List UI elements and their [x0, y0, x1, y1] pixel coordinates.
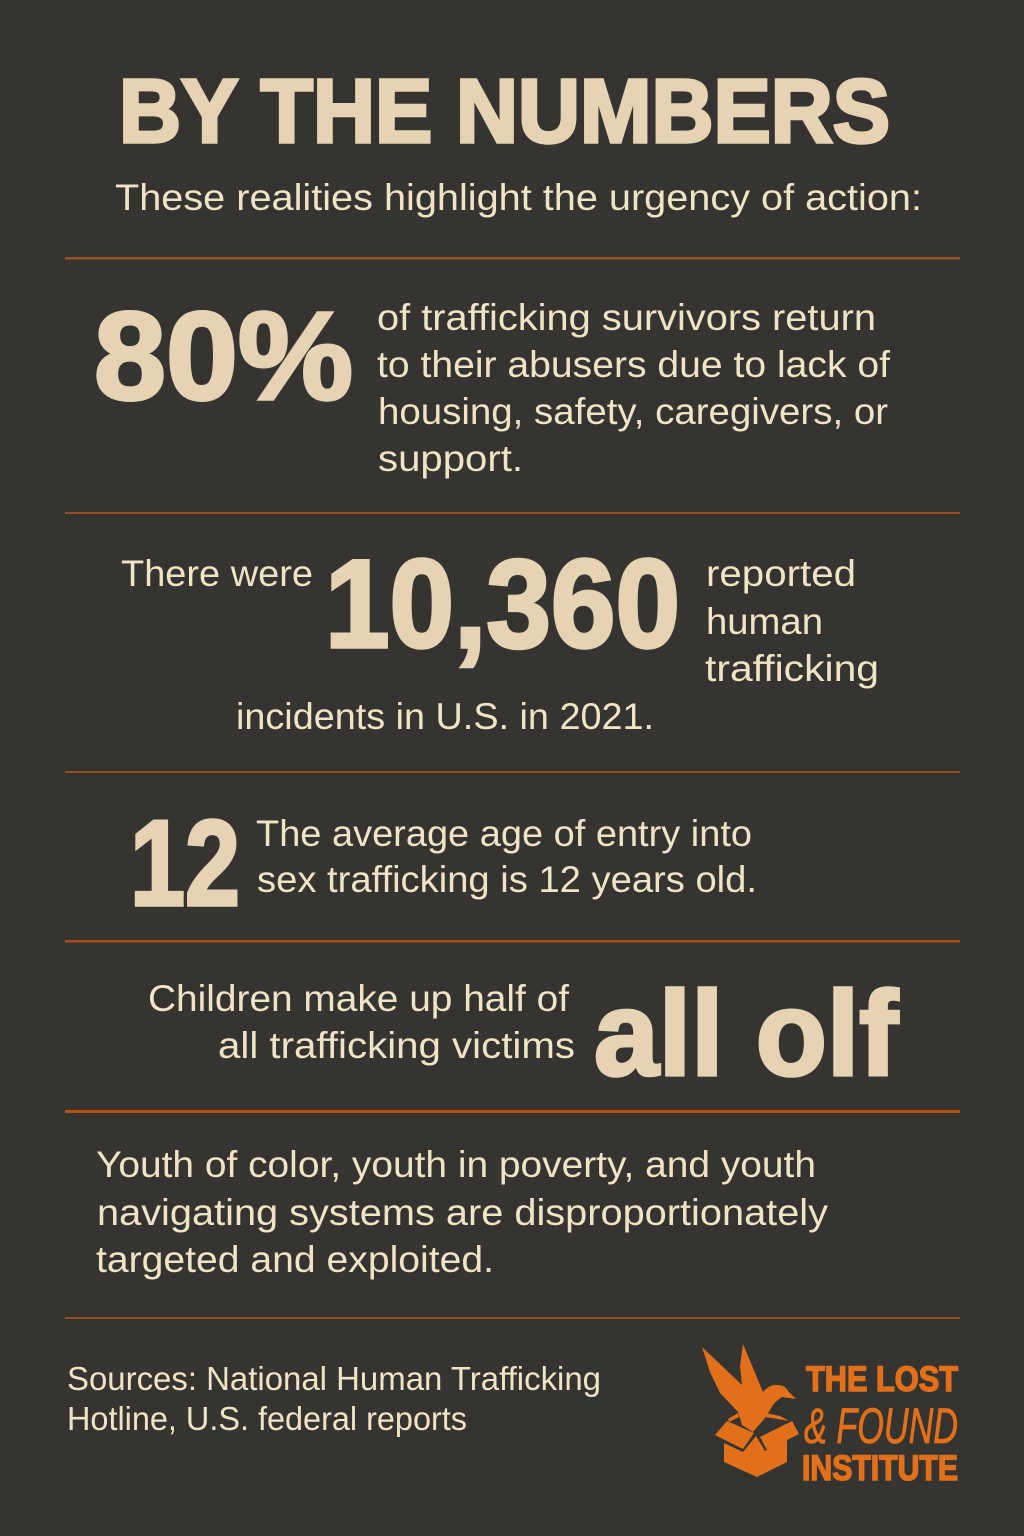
sources: Sources: National Human Trafficking [67, 1360, 601, 1397]
text: average age [256, 813, 757, 900]
text: children make up half: all trafficking victims [218, 1025, 575, 1066]
panel: 10,360 statistic [121, 535, 879, 737]
logo text [802, 1360, 958, 1488]
text: children make up half: Children make up half of [148, 978, 570, 1019]
logo text: INSTITUTE [802, 1449, 958, 1488]
text: average age: sex trafficking is 12 years old. [257, 859, 757, 900]
text: youth of color: Youth of color, youth in poverty, and youth [96, 1144, 816, 1185]
text: children make up half [148, 978, 575, 1066]
sources [67, 1360, 601, 1437]
text: youth of color: targeted and exploited. [96, 1239, 494, 1280]
title: BY THE NUMBERS [119, 62, 890, 162]
text: reported human trafficking: trafficking [705, 648, 879, 689]
text: youth of color [96, 1144, 829, 1280]
icon: bird rising from box [702, 1344, 799, 1477]
big number: 12: 12 [130, 795, 240, 931]
logo text: THE LOST [806, 1360, 958, 1399]
logo: The Lost & Found Institute [702, 1344, 958, 1488]
subtitle: These realities highlight the urgency of action: [115, 177, 922, 218]
text: survivors return: support. [378, 438, 523, 479]
text: there were: There were [121, 553, 313, 594]
panel: children statistic [148, 967, 899, 1101]
big number: 10,360: 10,360 [325, 535, 680, 674]
text: reported human trafficking [705, 553, 879, 689]
text: reported human trafficking: human [706, 601, 823, 642]
sources: Hotline, U.S. federal reports [67, 1400, 467, 1437]
big words: all olf: all olf [594, 967, 899, 1101]
text: average age: The average age of entry into [256, 813, 752, 854]
text: youth of color: navigating systems are disproportionately [97, 1192, 829, 1233]
text: survivors return: housing, safety, caregivers, or [378, 391, 888, 432]
text: incidents: incidents in U.S. in 2021. [236, 696, 654, 737]
text: reported human trafficking: reported [706, 553, 856, 594]
text: survivors return [377, 297, 891, 479]
text: survivors return: of trafficking survivors return [377, 297, 876, 338]
panel: age 12 statistic [130, 795, 757, 931]
logo text: & FOUND [804, 1398, 958, 1454]
big number: 80%: 80% [94, 287, 353, 426]
panel: 80% statistic [94, 287, 891, 479]
text: survivors return: to their abusers due to lack of [377, 344, 891, 385]
